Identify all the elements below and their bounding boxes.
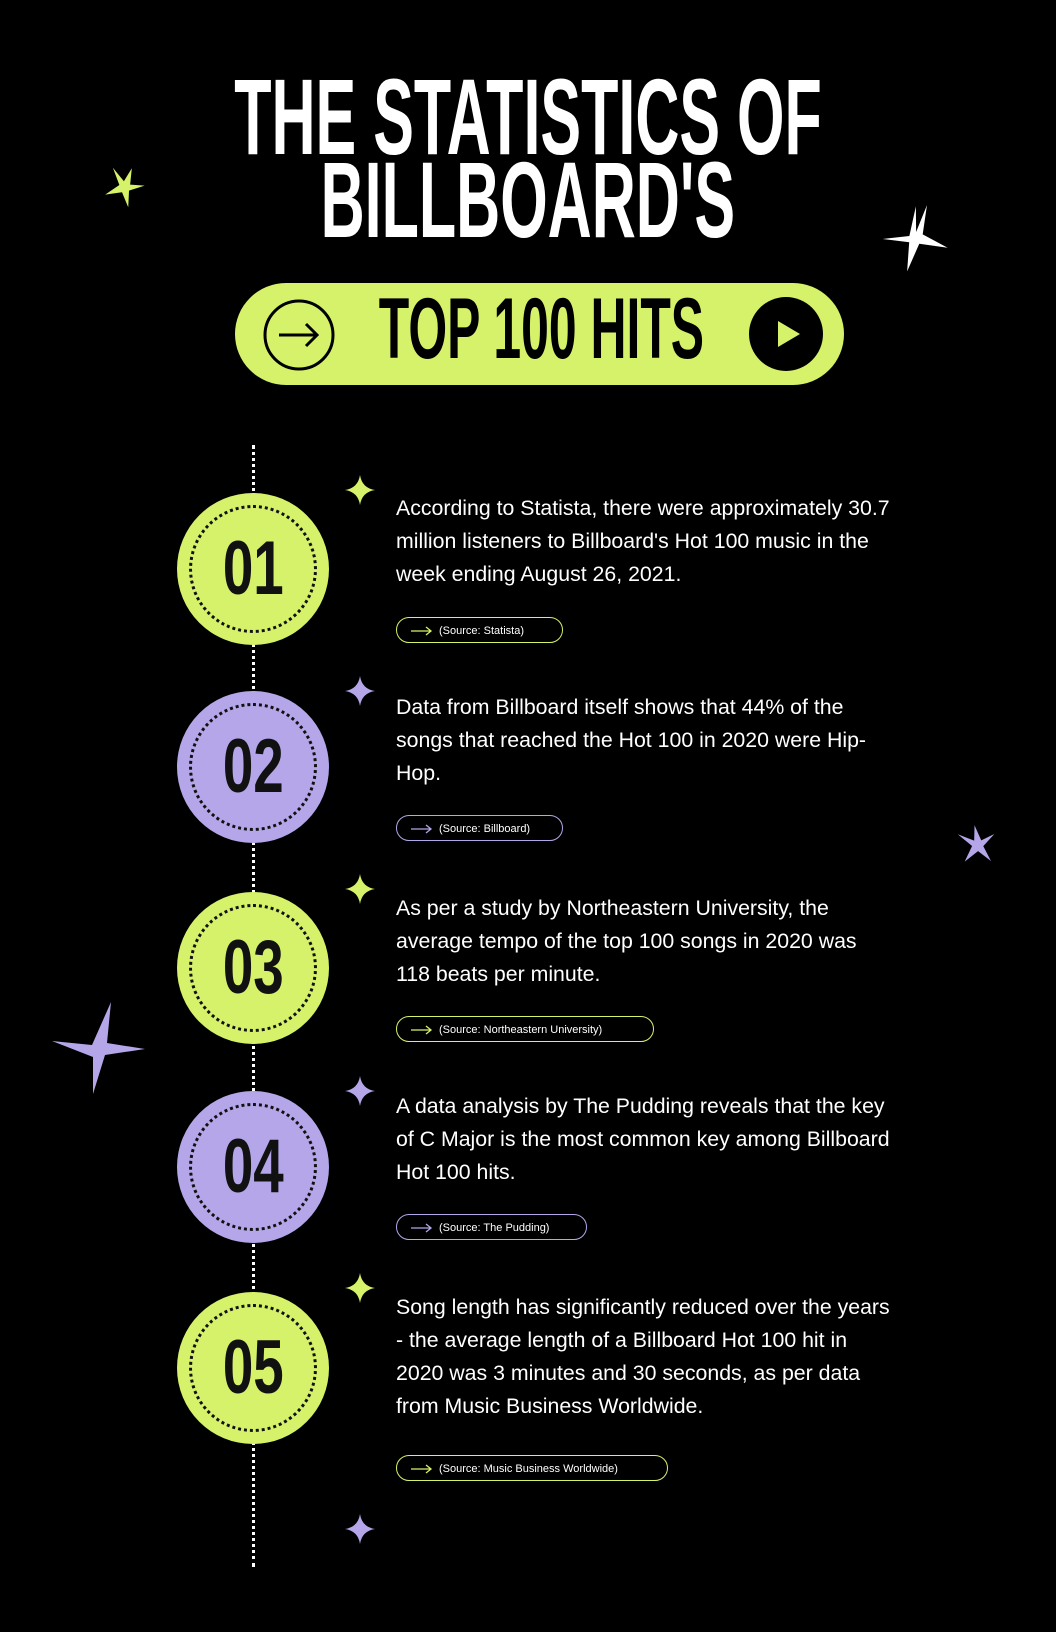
icon: arrow circle [264,300,334,370]
text 04: A data analysis by The Pudding reveals that the key of C Major is the most common key among Billboard Hot 100 hits. [396,1094,890,1184]
circle 04: 04 [223,1124,283,1209]
circle 02 [177,691,329,843]
item 03 [177,892,857,1044]
source 02 [396,815,563,841]
circle 03: 03 [223,925,283,1010]
circle 05 [177,1292,329,1444]
star: lavender right [958,825,994,862]
star: white top-right [883,205,948,272]
item 04 [177,1091,890,1243]
title line 1: THE STATISTICS OF [234,56,822,177]
item 01 [177,493,890,645]
source 03: (Source: Northeastern University) [439,1024,602,1036]
source 04 [396,1214,587,1240]
source 04: (Source: The Pudding) [439,1222,549,1234]
source 03 [396,1016,654,1042]
circle 02: 02 [223,724,283,809]
star: lavender big left [52,1002,145,1094]
source 05 [396,1455,668,1481]
text 01: According to Statista, there were approximately 30.7 million listeners to Billboard's Hot 100 music in the week ending August 26, 2021. [396,496,890,586]
item 02 [177,691,866,843]
source 01 [396,617,563,643]
circle 04 [177,1091,329,1243]
text 05: Song length has significantly reduced over the years - the average length of a Billboard Hot 100 hit in 2020 was 3 minutes and 30 seconds, as per data from Music Business Worldwide. [396,1295,890,1418]
text 02: Data from Billboard itself shows that 44% of the songs that reached the Hot 100 in 2020 were Hip-Hop. [396,695,866,785]
source 05: (Source: Music Business Worldwide) [439,1463,618,1475]
text 03: As per a study by Northeastern University, the average tempo of the top 100 songs in 2020 was 118 beats per minute. [396,896,857,986]
source 01: (Source: Statista) [439,625,524,637]
timeline dotted line [252,445,255,1567]
title line 2: BILLBOARD'S [321,139,735,260]
circle 03 [177,892,329,1044]
circle 01 [177,493,329,645]
item 05 [177,1292,890,1481]
pill text: TOP 100 HITS [378,281,704,377]
pill: top 100 hits [235,283,844,385]
source 02: (Source: Billboard) [439,823,530,835]
circle 05: 05 [223,1325,283,1410]
circle 01: 01 [223,526,283,611]
star: lime top-left [105,168,144,207]
icon: play button [749,297,823,371]
